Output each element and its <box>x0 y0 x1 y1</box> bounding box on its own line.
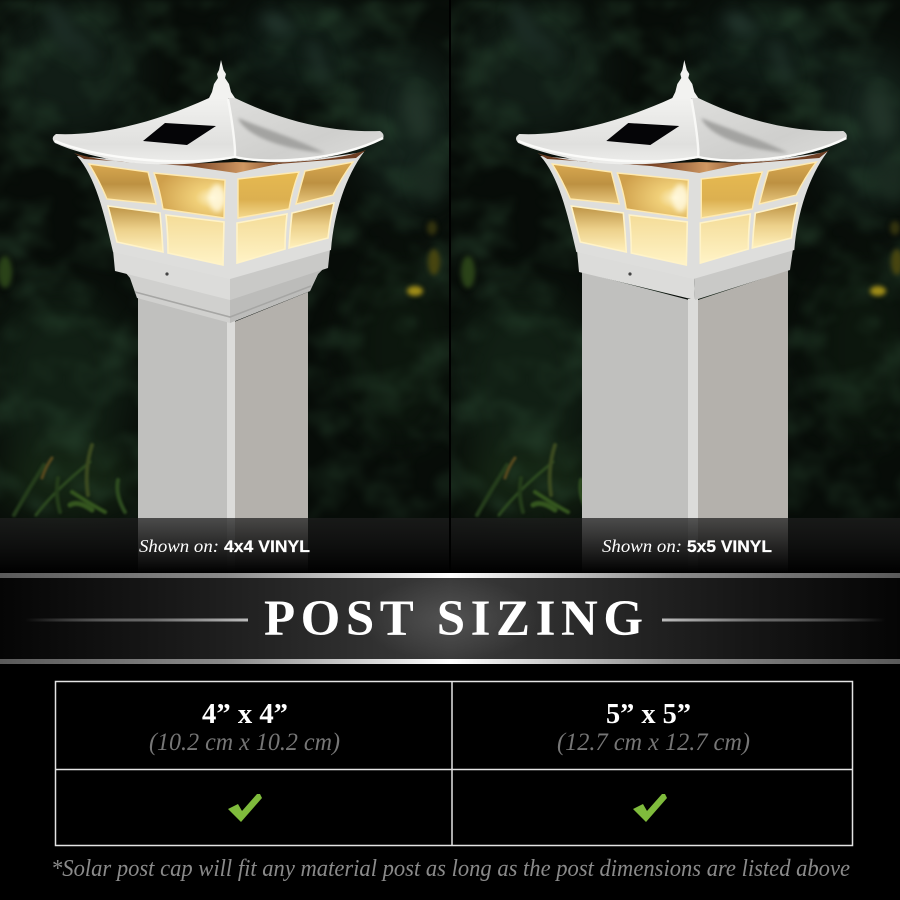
cell: 4 by 4 size: (10.2 cm x 10.2 cm) <box>149 729 340 756</box>
footnote: *Solar post cap will fit any material post as long as the post dimensions are listed above <box>51 856 850 882</box>
sizing table <box>55 681 853 846</box>
panel: 4x4 vinyl photo <box>0 0 449 568</box>
panel: 5x5 vinyl photo <box>451 0 900 568</box>
caption overlay <box>451 518 900 573</box>
cell: 5 by 5 size <box>557 698 750 756</box>
caption: shown on 5x5 vinyl <box>602 540 772 552</box>
caption overlay <box>0 518 449 573</box>
lamp base band <box>113 249 330 300</box>
title banner <box>0 573 900 664</box>
title text: POST SIZING <box>264 591 643 647</box>
post: 4x4 vinyl <box>138 292 308 575</box>
lamp head 4x4 <box>53 60 384 279</box>
cell: 5 by 5 size: 5” x 5” <box>606 698 691 730</box>
cell: 4 by 4 size <box>149 698 340 756</box>
caption: shown on 5x5 vinyl: Shown on: <box>602 536 682 556</box>
caption: shown on 5x5 vinyl: 5x5 VINYL <box>687 538 772 556</box>
cell: 4 by 4 size: 4” x 4” <box>202 698 288 730</box>
lamp head 5x5 <box>516 60 847 279</box>
icon: green check 4x4 <box>228 794 262 822</box>
collar: 4x4 post skirt <box>126 270 322 323</box>
post: 5x5 vinyl <box>582 270 788 575</box>
caption: shown on 4x4 vinyl: 4x4 VINYL <box>224 538 310 556</box>
lamp base band <box>577 249 793 300</box>
icon: green check 5x5 <box>633 794 667 822</box>
caption: shown on 4x4 vinyl <box>139 540 310 552</box>
cell: 5 by 5 size: (12.7 cm x 12.7 cm) <box>557 729 750 756</box>
caption: shown on 4x4 vinyl: Shown on: <box>139 536 219 556</box>
